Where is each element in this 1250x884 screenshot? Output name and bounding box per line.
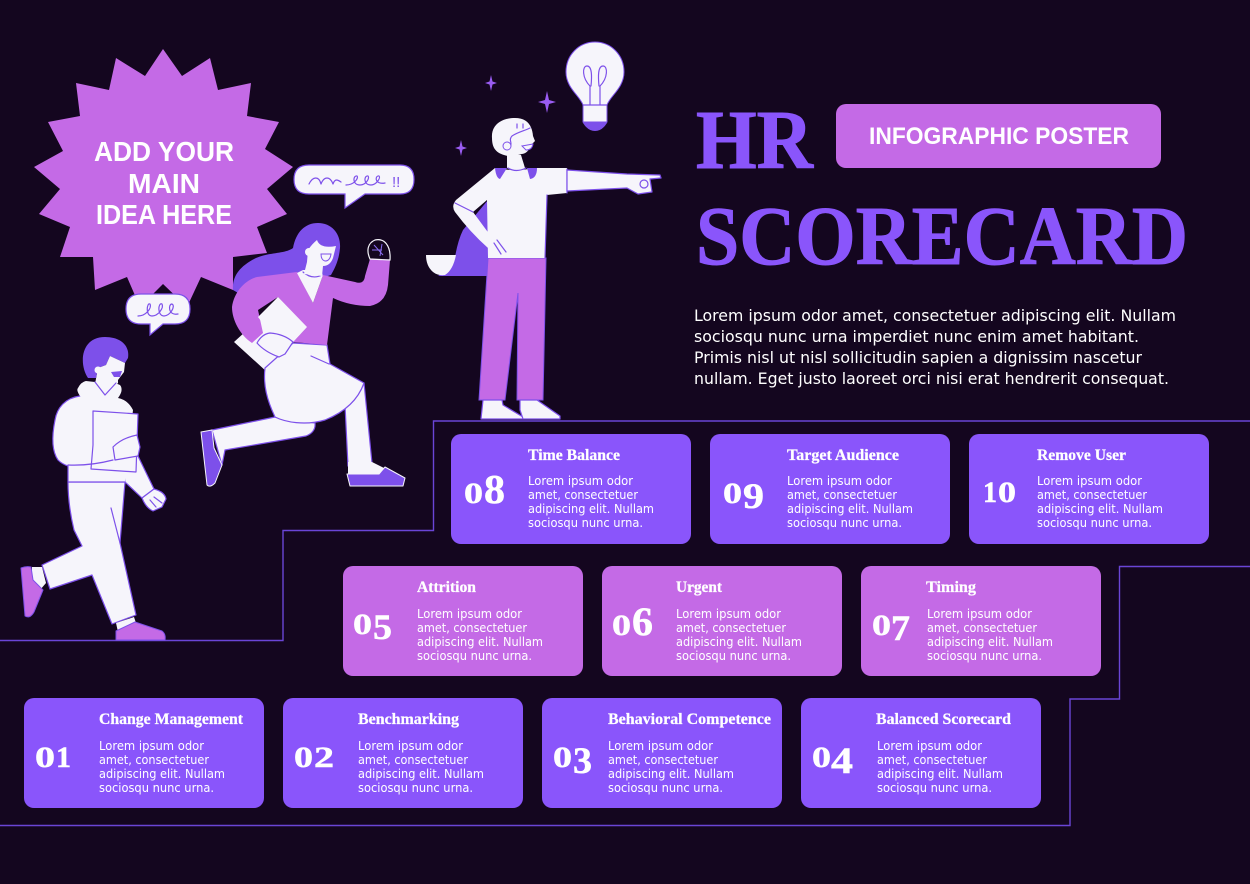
icon: sparkles [455, 75, 556, 156]
card 08: Time Balance: 8 [484, 466, 505, 512]
card 05: Attrition: amet, consectetuer [417, 621, 528, 635]
card 09: Target Audience: 0 [723, 477, 742, 510]
card 07: Timing: sociosqu nunc urna. [927, 649, 1042, 663]
badge: infographic poster: INFOGRAPHIC POSTER [869, 123, 1129, 150]
card 04: Balanced Scorecard: 4 [831, 741, 853, 782]
intro text block: Lorem ipsum odor amet, consectetuer adipiscing elit. Nullam [694, 306, 1176, 325]
card 09: Target Audience: sociosqu nunc urna. [787, 516, 902, 530]
starburst callout [34, 49, 293, 307]
card 05: Attrition: Lorem ipsum odor [417, 607, 523, 621]
card 02: Benchmarking: 2 [314, 741, 334, 774]
badge: infographic poster [836, 104, 1161, 168]
card 01: Change Management: 0 [35, 741, 55, 774]
card 09: Target Audience: Lorem ipsum odor [787, 474, 893, 488]
card 01: Change Management: 1 [56, 741, 71, 774]
card 06: Urgent: sociosqu nunc urna. [676, 649, 791, 663]
card 04: Balanced Scorecard: 0 [812, 741, 831, 774]
intro text block: Primis nisl ut nisl sollicitudin sapien a dignissim nascetur [694, 348, 1142, 367]
figure: running woman with papers [201, 223, 405, 486]
card 04: Balanced Scorecard: adipiscing elit. Nullam [877, 767, 1003, 781]
card 10: Remove User: 1 [983, 476, 997, 509]
card 06: Urgent: amet, consectetuer [676, 621, 787, 635]
card 05: Attrition: adipiscing elit. Nullam [417, 635, 543, 649]
card 04: Balanced Scorecard: Lorem ipsum odor [877, 739, 983, 753]
figure: pointing man with cape [426, 118, 661, 419]
title: scorecard: SCORECARD [696, 190, 1188, 283]
intro text block: sociosqu nunc urna imperdiet nunc enim amet habitant. [694, 327, 1139, 346]
card 10: Remove User: amet, consectetuer [1037, 488, 1148, 502]
card 08: Time Balance: sociosqu nunc urna. [528, 516, 643, 530]
card 09: Target Audience: 9 [743, 476, 764, 516]
card 07: Timing: adipiscing elit. Nullam [927, 635, 1053, 649]
card 06: Urgent: Lorem ipsum odor [676, 607, 782, 621]
card 05: Attrition: 0 [353, 608, 372, 641]
card 03: Behavioral Competence: sociosqu nunc urna. [608, 781, 723, 795]
card 05: Attrition: sociosqu nunc urna. [417, 649, 532, 663]
card 07: Timing: Lorem ipsum odor [927, 607, 1033, 621]
card 04: Balanced Scorecard [801, 698, 1041, 808]
card 07: Timing: Timing [926, 579, 976, 596]
card 06: Urgent: 0 [612, 609, 631, 642]
card 02: Benchmarking: sociosqu nunc urna. [358, 781, 473, 795]
card 08: Time Balance: amet, consectetuer [528, 488, 639, 502]
starburst callout: ADD YOUR [94, 136, 234, 167]
speech bubble: large: !! [392, 174, 400, 191]
card 02: Benchmarking: amet, consectetuer [358, 753, 469, 767]
card 06: Urgent: 6 [632, 599, 653, 644]
card 01: Change Management: Change Management [99, 711, 244, 728]
card 07: Timing: amet, consectetuer [927, 621, 1038, 635]
card 01: Change Management: adipiscing elit. Nullam [99, 767, 225, 781]
card 03: Behavioral Competence: 3 [573, 741, 592, 782]
card 10: Remove User [969, 434, 1209, 544]
card 09: Target Audience: Target Audience [787, 447, 899, 464]
card 01: Change Management: sociosqu nunc urna. [99, 781, 214, 795]
speech bubble: large [294, 165, 414, 208]
starburst callout: MAIN [128, 168, 200, 199]
card 10: Remove User: Lorem ipsum odor [1037, 474, 1143, 488]
card 04: Balanced Scorecard: Balanced Scorecard [876, 711, 1011, 728]
intro text block [694, 306, 1176, 388]
starburst callout: IDEA HERE [96, 199, 232, 230]
card 05: Attrition: 5 [373, 607, 392, 647]
card 09: Target Audience [710, 434, 950, 544]
card 06: Urgent: Urgent [676, 579, 723, 596]
card 05: Attrition [343, 566, 583, 676]
title: HR: HR [696, 94, 814, 187]
card 01: Change Management: amet, consectetuer [99, 753, 210, 767]
card 05: Attrition: Attrition [417, 579, 476, 596]
card 02: Benchmarking: Benchmarking [358, 711, 459, 728]
card 04: Balanced Scorecard: sociosqu nunc urna. [877, 781, 992, 795]
card 10: Remove User: Remove User [1037, 447, 1126, 464]
card 01: Change Management [24, 698, 264, 808]
speech bubble: small [126, 294, 190, 335]
card 03: Behavioral Competence: Lorem ipsum odor [608, 739, 714, 753]
intro text block: nullam. Eget justo laoreet orci nisi erat hendrerit consequat. [694, 369, 1169, 388]
card 09: Target Audience: amet, consectetuer [787, 488, 898, 502]
card 08: Time Balance: Time Balance [528, 447, 620, 464]
card 02: Benchmarking [283, 698, 523, 808]
card 02: Benchmarking: 0 [294, 741, 313, 774]
card 06: Urgent: adipiscing elit. Nullam [676, 635, 802, 649]
card 08: Time Balance: Lorem ipsum odor [528, 474, 634, 488]
card 01: Change Management: Lorem ipsum odor [99, 739, 205, 753]
figure: walking man with book [21, 337, 166, 640]
card 03: Behavioral Competence: 0 [553, 741, 572, 774]
card 03: Behavioral Competence: Behavioral Competence [608, 711, 771, 728]
card 06: Urgent [602, 566, 842, 676]
card 02: Benchmarking: Lorem ipsum odor [358, 739, 464, 753]
card 08: Time Balance: 0 [464, 477, 483, 510]
card 09: Target Audience: adipiscing elit. Nullam [787, 502, 913, 516]
icon: light bulb [566, 42, 624, 131]
card 07: Timing [861, 566, 1101, 676]
card 04: Balanced Scorecard: amet, consectetuer [877, 753, 988, 767]
card 03: Behavioral Competence [542, 698, 782, 808]
card 02: Benchmarking: adipiscing elit. Nullam [358, 767, 484, 781]
card 08: Time Balance [451, 434, 691, 544]
card 10: Remove User: 0 [998, 476, 1016, 509]
card 07: Timing: 0 [872, 609, 891, 642]
card 08: Time Balance: adipiscing elit. Nullam [528, 502, 654, 516]
card 07: Timing: 7 [891, 608, 910, 648]
card 10: Remove User: sociosqu nunc urna. [1037, 516, 1152, 530]
card 03: Behavioral Competence: adipiscing elit. Nullam [608, 767, 734, 781]
card 10: Remove User: adipiscing elit. Nullam [1037, 502, 1163, 516]
card 03: Behavioral Competence: amet, consectetuer [608, 753, 719, 767]
